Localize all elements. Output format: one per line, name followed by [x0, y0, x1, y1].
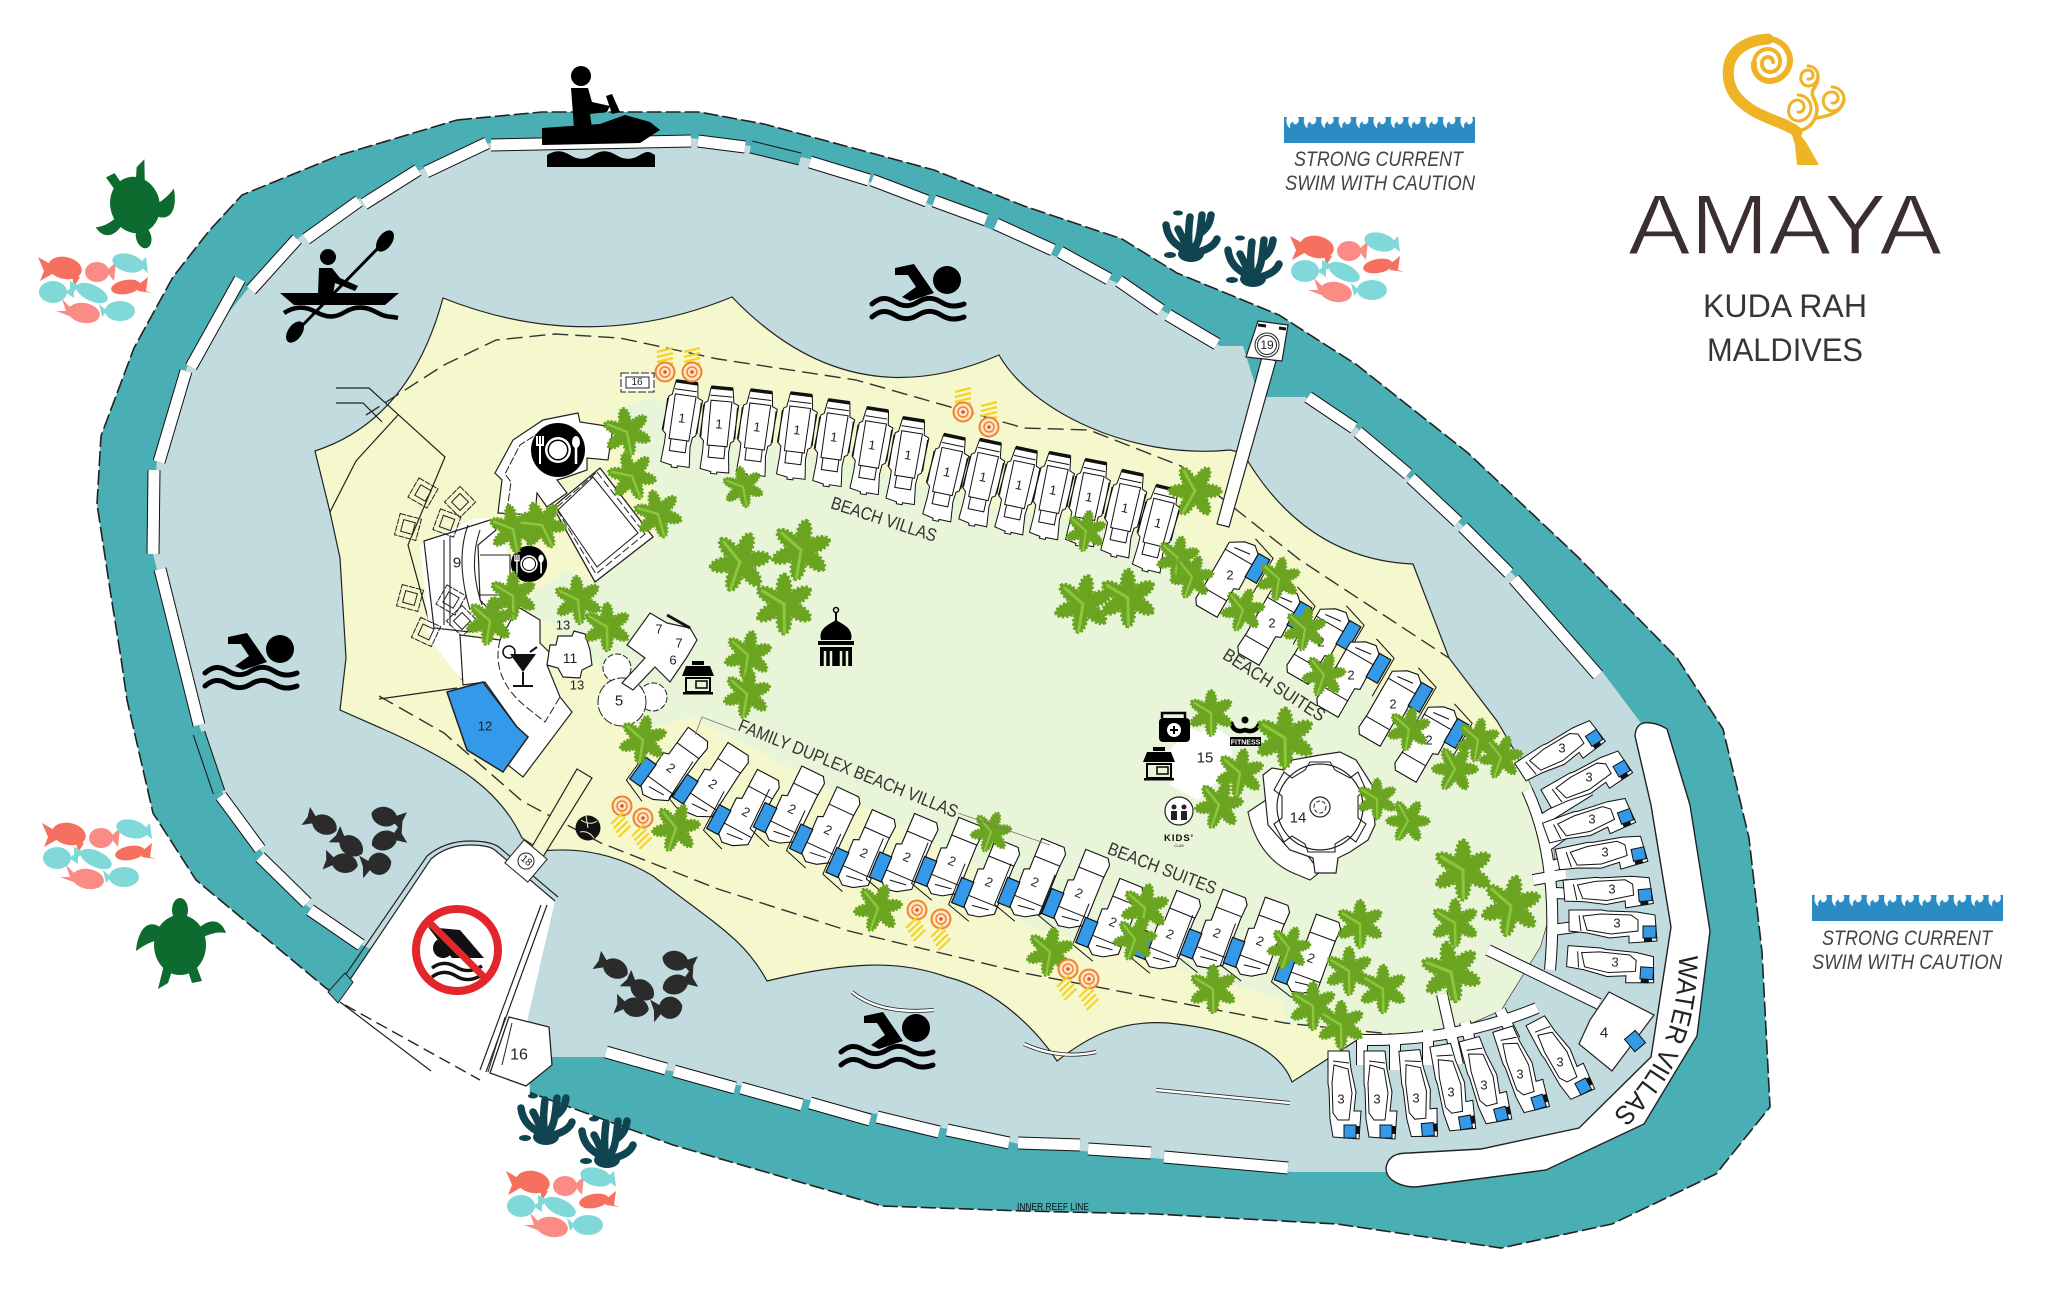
icon: fitness: FITNESS [1231, 740, 1261, 746]
logo: AMAYA wordmark: AMAYA [1628, 178, 1942, 273]
icon: small dining [511, 546, 547, 582]
water villa walkways [1357, 790, 1600, 1070]
buildings 5 6 7: 7 [655, 622, 663, 636]
icon: shop near building 6 [682, 661, 714, 694]
icon: jet ski [542, 66, 660, 167]
beach villas row: 1 [942, 464, 952, 480]
lagoon sandbars [852, 992, 1290, 1103]
family duplex and beach suites row south: 2 [739, 804, 753, 820]
family duplex and beach suites row south: 2 [1305, 950, 1317, 966]
beach suites row north-east: 2 [1268, 616, 1276, 630]
buildings 5 6 7: 7 [675, 636, 683, 650]
icon: coral north-east 1 [1164, 210, 1217, 262]
family duplex and beach suites row south: 2 [983, 874, 995, 890]
icon: kids club: KIDS' [1164, 833, 1194, 844]
callout: strong current north: SWIM WITH CAUTION [1285, 172, 1476, 195]
beach suites row north-east: 2 [1226, 568, 1234, 582]
building 11 and 13 [547, 618, 592, 692]
water villas [1328, 715, 1657, 1139]
water villas: 3 [1588, 812, 1596, 826]
label: beach suites south: BEACH SUITES [1105, 838, 1219, 898]
building 14 spa [1248, 752, 1375, 880]
beach villas row: 1 [903, 447, 913, 463]
pool bar and pool 12: 12 [478, 718, 492, 734]
icon: black fish west [302, 803, 407, 878]
icon: coral north-east 2 [1226, 236, 1279, 287]
icon: swimmer south [841, 1012, 933, 1067]
beach suites row north-east: 2 [1347, 668, 1355, 682]
jetty and sign 19 [1217, 321, 1288, 527]
icon: reef fish north-east [1290, 229, 1404, 305]
family duplex and beach suites row south: 2 [706, 776, 720, 792]
building: restaurant [495, 413, 613, 515]
label: inner reef line: INNER REEF LINE [1017, 1202, 1089, 1213]
family duplex and beach suites row south [622, 716, 1343, 1006]
beach villas row: 1 [1084, 489, 1094, 505]
callout: strong current east: STRONG CURRENT [1822, 927, 1994, 950]
family duplex and beach suites row south: 2 [785, 801, 799, 817]
building 16 south: 16 [510, 1046, 528, 1064]
beach villas row: 1 [1048, 482, 1058, 498]
logo: tree mark [1728, 39, 1844, 165]
water villas: 3 [1613, 916, 1621, 930]
water villas white sand arc [1386, 723, 1710, 1187]
building 9 [420, 518, 547, 680]
box 16 north: 16 [631, 377, 643, 388]
icon: mosque [818, 608, 854, 666]
water villas: 3 [1585, 770, 1593, 784]
icon: shop [1143, 747, 1175, 780]
water villas: 3 [1373, 1092, 1381, 1106]
callout: strong current east: SWIM WITH CAUTION [1812, 951, 2003, 974]
icon: swimmer west [205, 633, 297, 688]
beach villas row: 1 [752, 419, 762, 435]
water villa 4: 4 [1600, 1024, 1608, 1042]
beach villas row: 1 [1014, 477, 1024, 493]
label: beach suites north: BEACH SUITES [1219, 644, 1329, 725]
cabanas near building 9 [395, 478, 478, 647]
jetty and sign 19: 19 [1260, 338, 1274, 352]
icon: no swimming sign [416, 909, 498, 991]
no swimming zone [328, 841, 558, 1100]
beach [315, 297, 1556, 1082]
water villas: 3 [1337, 1092, 1345, 1106]
label: beach villas: BEACH VILLAS [828, 493, 939, 546]
water villas: 3 [1601, 844, 1609, 860]
family duplex and beach suites row south: 2 [822, 822, 834, 838]
family duplex and beach suites row south: 2 [1164, 926, 1176, 942]
family duplex and beach suites row south: 2 [1254, 933, 1266, 949]
buildings 5 6 7 [598, 613, 697, 726]
water villas: 3 [1447, 1084, 1455, 1100]
hotel pool deck [553, 468, 653, 582]
beach villas row: 1 [978, 469, 988, 485]
logo: MALDIVES: MALDIVES [1707, 332, 1863, 368]
pool bar and pool 12 [447, 607, 572, 777]
icon: turtle north-west [82, 154, 187, 259]
icon: reef fish west [42, 816, 156, 892]
icon: coral south 2 [580, 1116, 633, 1168]
water villas: 3 [1516, 1066, 1524, 1082]
beach villas row: 1 [1120, 500, 1130, 516]
water villas: 3 [1611, 954, 1619, 970]
beach suites row north-east [1193, 528, 1476, 792]
family duplex and beach suites row south: 2 [946, 853, 958, 869]
water villas: 3 [1556, 1054, 1564, 1070]
left service boundary lines [330, 388, 462, 699]
icon: restaurant [531, 423, 585, 477]
label: family duplex beach villas: FAMILY DUPLEX BEACH VILLAS [736, 715, 961, 822]
building 15 with services: 15 [1197, 750, 1213, 766]
callout: strong current north: STRONG CURRENT [1294, 148, 1465, 171]
jetty to sign box 18 [505, 769, 592, 882]
inner lagoon [152, 138, 1690, 1172]
icon: kids club: CLUB [1174, 844, 1184, 848]
water villas: 3 [1558, 740, 1566, 756]
beach villas row: 1 [1153, 515, 1163, 531]
callout: strong current east [1812, 895, 2003, 974]
beach villas row: 1 [829, 429, 839, 445]
icon: swimmer north [872, 264, 964, 319]
box 18: 18 [518, 853, 534, 869]
beach villas row: 1 [867, 437, 877, 453]
family duplex and beach suites row south: 2 [1107, 914, 1119, 930]
water villas: 3 [1608, 882, 1616, 896]
beach villas row: 1 [677, 410, 687, 426]
beach villas row [657, 380, 1184, 576]
beach suites row north-east: 2 [1425, 732, 1433, 748]
icon: reef fish south [506, 1164, 620, 1240]
beach suites row north-east: 2 [1317, 634, 1325, 650]
breakwater strips [153, 141, 1598, 1168]
building 16 south [488, 1017, 552, 1086]
icon: volleyball [576, 816, 600, 840]
green interior [513, 397, 1556, 1038]
outer reef [97, 112, 1770, 1248]
box 16 north [621, 373, 654, 392]
beach suites row north-east: 2 [1389, 696, 1397, 712]
building 9: 9 [453, 554, 461, 572]
beach villas row: 1 [792, 422, 802, 438]
beach boundary dashes [366, 334, 1449, 1038]
family duplex and beach suites row south: 2 [858, 845, 870, 861]
icon: coral south 1 [519, 1094, 572, 1145]
buildings 5 6 7: 5 [615, 692, 623, 710]
callout: strong current north [1284, 117, 1476, 195]
water villas: 3 [1480, 1078, 1488, 1092]
logo: KUDA RAH: KUDA RAH [1703, 288, 1867, 324]
building 11 and 13: 13 [570, 678, 584, 692]
family duplex and beach suites row south: 2 [664, 760, 678, 776]
icon: turtle south-west [136, 898, 226, 989]
icon: reef fish north-west [38, 250, 152, 326]
water villa 4 [1579, 992, 1654, 1071]
water villas: 3 [1412, 1090, 1420, 1106]
label: water villas: WATER VILLAS [1616, 956, 1698, 1124]
building 11 and 13: 13 [556, 618, 570, 632]
icon: kids club [1164, 797, 1194, 848]
building 15 with services [1143, 713, 1261, 848]
buildings 5 6 7: 6 [669, 652, 677, 668]
icon: black fish south [593, 947, 698, 1022]
palm trees [456, 404, 1553, 1056]
family duplex and beach suites row south: 2 [1073, 885, 1085, 901]
icon: kayak [280, 227, 399, 346]
beach villas row: 1 [715, 416, 723, 432]
family duplex and beach suites row south: 2 [901, 849, 913, 865]
building 14 spa: 14 [1290, 810, 1306, 826]
icon: cocktail [503, 646, 537, 686]
label: family duplex beach villas [695, 715, 1050, 845]
family duplex and beach suites row south: 2 [1029, 874, 1041, 890]
family duplex and beach suites row south: 2 [1211, 925, 1223, 941]
icon: first aid [1159, 713, 1190, 742]
building 11 and 13: 11 [563, 650, 577, 666]
beach parasols [609, 348, 1100, 1010]
